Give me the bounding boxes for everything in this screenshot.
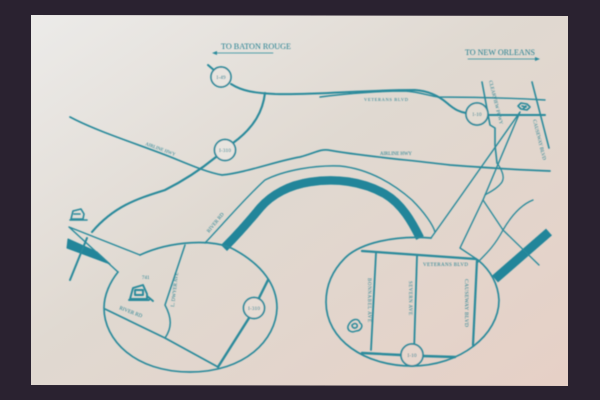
- shield: I-310 inset: I-310: [248, 306, 260, 312]
- road: Airline Hwy: AIRLINE HWY: [144, 142, 176, 158]
- shield: I-310 upper: [214, 140, 236, 160]
- inset road: Severn: [407, 256, 417, 352]
- road: Clearview Pkwy: [482, 80, 503, 163]
- inset road: Veterans Blvd top: [362, 251, 476, 268]
- icon: house in left inset: 741: [142, 276, 150, 281]
- inset road: Veterans Blvd top: VETERANS BLVD: [423, 263, 468, 268]
- shield: I-310 inset: [244, 298, 264, 318]
- shield: I-10 inset: [401, 344, 423, 366]
- road: Clearview Pkwy: CLEARVIEW PKWY: [487, 80, 503, 125]
- heading: to New Orleans: [465, 48, 540, 61]
- river: left section: [67, 238, 110, 280]
- icon: venue in right inset: [348, 319, 362, 332]
- shield: I-49 upper left: I-49: [216, 75, 226, 81]
- shield: I-310 upper: I-310: [219, 148, 231, 154]
- road: Airline Hwy: [70, 117, 550, 175]
- inset road: River Rd lower: [105, 305, 218, 367]
- road: River Rd upper: RIVER RD: [206, 212, 226, 234]
- icon: Baton Rouge venue: [70, 209, 87, 220]
- inset road: Bonnabel: BONNABEL AVE: [366, 278, 371, 322]
- shield: I-10 right: [466, 103, 488, 125]
- heading: to Baton Rouge: [212, 42, 291, 55]
- heading: to New Orleans: TO NEW ORLEANS: [465, 48, 535, 57]
- inset road: Severn: SEVERN AVE: [407, 281, 412, 315]
- map drawing: [67, 42, 550, 372]
- river: lower right section: [495, 232, 549, 279]
- road: Airline Hwy: AIRLINE HWY: [380, 152, 412, 157]
- icon: house in left inset: [129, 276, 153, 301]
- inset road: I-310 segment: [218, 280, 268, 367]
- inset: right detail map: [326, 237, 499, 366]
- shield: I-10 right: I-10: [472, 112, 482, 118]
- shield: I-49 upper left: [211, 67, 231, 87]
- inset road: Bonnabel: [366, 253, 376, 350]
- road: Causeway Blvd: CAUSEWAY BLVD: [531, 119, 546, 161]
- river: Mississippi thick section: [224, 180, 420, 248]
- inset: left detail map: [104, 243, 277, 372]
- road: local loop and creek: [478, 163, 539, 265]
- inset road: I-10 bottom: [362, 353, 455, 357]
- shield: I-10 inset: I-10: [407, 353, 417, 359]
- icon: New Orleans venue: [518, 103, 530, 110]
- inset road: Causeway: CAUSEWAY BLVD: [463, 279, 469, 327]
- inset road: River Rd lower: RIVER RD: [118, 305, 143, 320]
- road: River Rd upper: [205, 166, 435, 243]
- inset road: Causeway: [463, 260, 477, 345]
- road: I-49 interstate: [208, 65, 466, 113]
- road: Veterans Blvd: VETERANS BLVD: [364, 97, 409, 102]
- callout: right pointer: [431, 112, 520, 260]
- road: I-310: [92, 93, 265, 232]
- street label: left inset: L. DWYER AVE: [171, 272, 180, 307]
- callout: left pointer: [69, 227, 140, 272]
- road: Causeway Blvd: [531, 82, 549, 161]
- road: I-10 east spur: [488, 114, 545, 116]
- road: Lapalco street: [165, 245, 185, 338]
- road: Veterans Blvd: [320, 91, 545, 102]
- heading: to Baton Rouge: TO BATON ROUGE: [221, 42, 291, 51]
